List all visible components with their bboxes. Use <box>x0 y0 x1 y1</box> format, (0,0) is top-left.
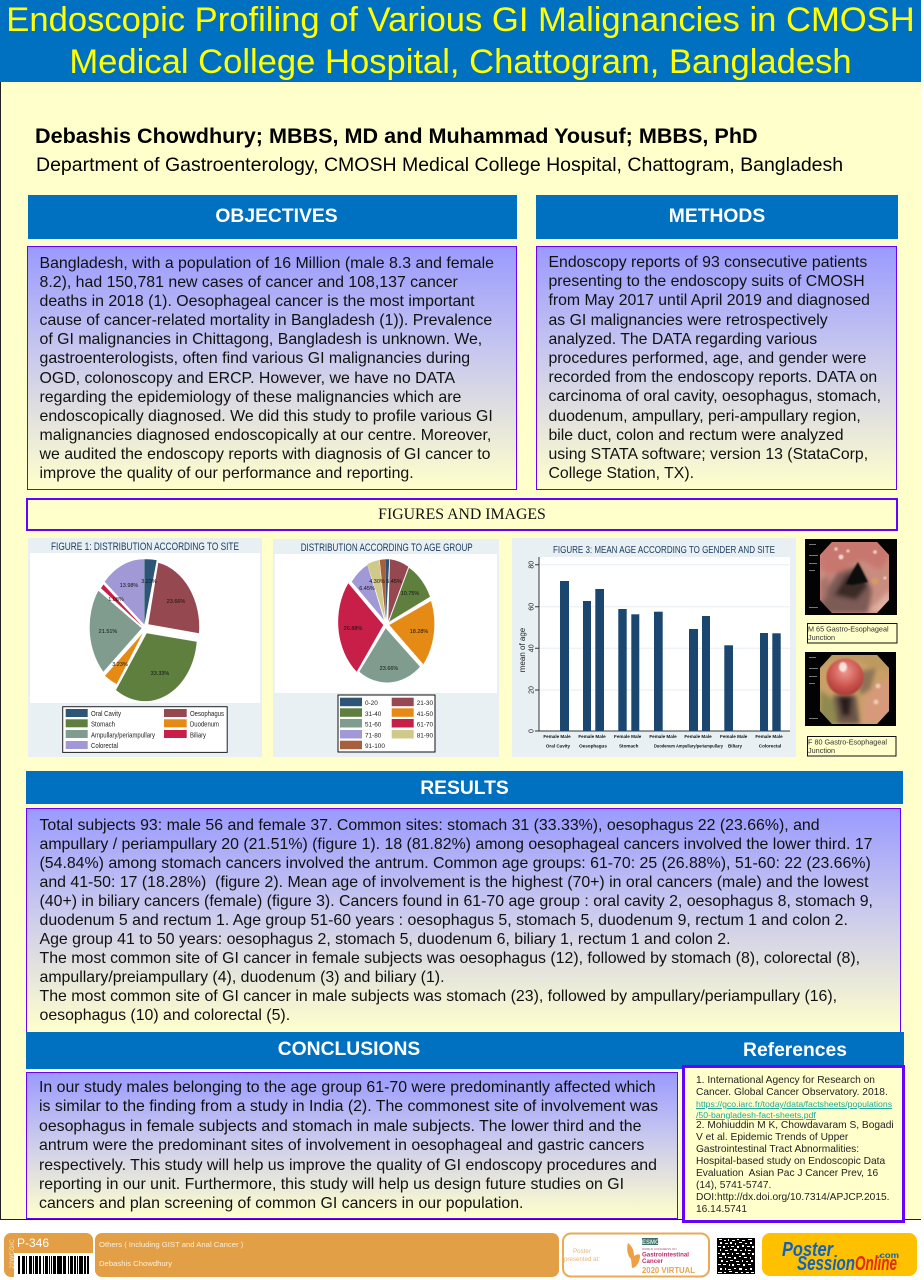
footer: PosterSessionOnline logo: Online <box>855 1253 897 1275</box>
chart: figure 1 pie by site: 21.51% <box>99 629 117 635</box>
panel: conclusions text: In our study males belonging to the age group 61-70 were predominantly affected which <box>39 1079 656 1096</box>
chart: figure 1 pie by site: Oesophagus <box>190 709 224 718</box>
panel: references list: DOI:http://dx.doi.org/10.7314/APJCP.2015. <box>696 1192 890 1203</box>
chart: figure 2 pie by age group: 6.45% <box>359 586 375 592</box>
chart: figure 2 pie by age group: 91-100 <box>365 743 385 750</box>
panel: references list: Cancer. Global Cancer Observatory. 2018. 2. Mohiuddin M K, Chowdavaram S, Bogadi <box>696 1087 894 1131</box>
panel: conclusions text: respectively. This study will help us improve the quality of GI endoscopy procedures and <box>39 1157 657 1174</box>
panel: conclusions text: antrum were the predominant sites of involvement in oesophageal and gastric cancers <box>39 1137 644 1154</box>
chart: figure 1 pie by site: Oral Cavity <box>91 709 121 718</box>
footer: topic and author bar <box>95 1233 559 1277</box>
chart: figure 2 pie by age group: 5.45% <box>386 579 402 585</box>
chart: figure 3 mean age bar chart: Oesophagus <box>579 744 607 748</box>
heading: results: RESULTS <box>420 778 509 799</box>
panel: methods text: Endoscopy reports of 93 consecutive patients <box>548 254 867 271</box>
chart: figure 2 pie by age group: 31-40 <box>365 711 382 718</box>
footer: conference badge <box>562 1232 710 1278</box>
panel: references list: Evaluation Asian Pac J Cancer Prev, 16 <box>696 1168 878 1179</box>
panel: results text: ampullary / periampullary 20 (21.51%) (figure 1). 18 (81.82%) among oesophageal cancers involved the lower third. 17 <box>40 836 873 853</box>
chart: figure 1 pie by site: Duodenum <box>190 720 219 728</box>
panel: results text: (40+) in biliary cancers (female) (figure 3). Cancers found in 61-70 age group : oral cavity 2, oesophagus 8, stomach 9, <box>40 893 873 910</box>
chart: figure 3 mean age bar chart <box>512 538 796 757</box>
chart: figure 2 pie by age group: 21-30 <box>417 700 433 707</box>
chart: figure 3 mean age bar chart: Female Male <box>543 734 571 739</box>
barcode <box>14 1253 93 1277</box>
panel: references list: 1. International Agency for Research on <box>696 1075 875 1086</box>
topic: Others ( Including GIST and Anal Cancer ) <box>99 1240 243 1249</box>
chart: figure 3 mean age bar chart: 80 <box>528 561 536 569</box>
panel: results text: ampullary/preiampullary (4), duodenum (3) and biliary (1). <box>40 969 444 986</box>
footer: poster number tab <box>4 1233 93 1277</box>
panel: results text: The most common site of GI cancer in male subjects was stomach (23), followed by ampullary/periampullary (16), <box>40 988 837 1005</box>
panel: results text: and 41-50: 17 (18.28%) (figure 2). Mean age of involvement is the highest (70+) in oral cancers (male) and the lowest <box>40 874 869 891</box>
chart: figure 3 mean age bar chart: 0 <box>528 729 536 733</box>
footer: conference badge: 2020 VIRTUAL <box>642 1266 695 1275</box>
chart: figure 1 pie by site: 33.33% <box>151 671 169 677</box>
heading: figures and images: FIGURES AND IMAGES <box>378 506 546 523</box>
footer: QR code <box>717 1238 755 1274</box>
chart: figure 2 pie by age group: 41-50 <box>417 711 433 718</box>
chart: figure 3 mean age bar chart: Female Male <box>578 734 606 739</box>
chart: figure 3 mean age bar chart: Oral Cavity <box>546 744 571 748</box>
image: endoscopy photo, female 80 <box>805 650 896 730</box>
chart: figure 3 mean age bar chart: 40 <box>528 644 536 652</box>
title banner: Endoscopic Profiling of Various GI Malignancies in CMOSH <box>6 1 915 39</box>
chart: figure 3 mean age bar chart: Ampullary/periampullary <box>676 744 723 748</box>
chart: figure 1 pie by site: 13.98% <box>120 583 138 589</box>
panel: references list: Hospital-based study on Endoscopic Data <box>696 1156 885 1167</box>
chart: figure 2 pie by age group: 0-20 <box>365 700 378 707</box>
heading: methods <box>536 195 898 239</box>
panel: references list: V et al. Epidemic Trends of Upper <box>696 1132 848 1143</box>
panel: conclusions text <box>26 1072 678 1219</box>
caption: female 80: F 80 Gastro-Esophageal <box>808 738 887 746</box>
footer: PosterSessionOnline logo: Poster <box>782 1239 834 1261</box>
panel: objectives text: improve the quality of our performance and reporting. <box>40 465 414 482</box>
panel: results text: oesophagus (10) and colorectal (5). <box>40 1007 290 1024</box>
panel: references list: /50-bangladesh-fact-sheets.pdf <box>696 1110 816 1120</box>
chart: figure 2 pie by age group: 23.66% <box>380 666 398 672</box>
authors: Debashis Chowdhury; MBBS, MD and Muhammad Yousuf; MBBS, PhD <box>35 123 758 148</box>
chart: figure 2 pie by age group: 26.88% <box>344 626 362 632</box>
chart: figure 3 mean age bar chart: Female Male <box>720 734 748 739</box>
panel: methods text: as GI malignancies were retrospectively <box>548 312 828 329</box>
panel: conclusions text: reporting in our unit. Furthermore, this study will help us design future studies on GI <box>39 1176 624 1193</box>
footer: conference badge: Gastrointestinal <box>642 1252 689 1258</box>
chart: figure 3 mean age bar chart: Female Male <box>649 734 677 739</box>
panel: references list: (14), 5741-5747. <box>696 1180 771 1191</box>
panel: methods text <box>536 246 897 490</box>
panel: results text: (54.84%) among stomach cancers involved the antrum. Common age groups: 61-70: 25 (26.88%), 51-60: 22 (23.66%) <box>40 855 871 872</box>
panel: objectives text: malignancies diagnosed endoscopically at our centre. Moreover, <box>40 427 491 444</box>
panel: methods text: College Station, TX). <box>548 465 694 482</box>
chart: figure 2 pie by age group: DISTRIBUTION ACCORDING TO AGE GROUP <box>301 542 473 554</box>
panel: conclusions text: is similar to the finding from a study in India (2). The commonest site of involvement was <box>39 1098 658 1115</box>
heading: figures and images <box>26 498 898 531</box>
panel: results text: duodenum 5 and rectum 1. Age group 51-60 years : oesophagus 5, stomach 5, duodenum 9, rectum 1 and colon 2. <box>40 912 848 929</box>
chart: figure 3 mean age bar chart: Stomach <box>619 744 639 748</box>
panel: conclusions text: cancers and plan screening of common GI cancers in our population. <box>39 1195 523 1212</box>
author: Debashis Chowdhury <box>99 1259 172 1268</box>
caption: female 80: Junction <box>808 746 835 755</box>
panel: conclusions text: oesophagus in female subjects and stomach in male subjects. The lower third and the <box>39 1118 641 1135</box>
caption: male 65: Junction <box>808 633 835 642</box>
panel: objectives text: Bangladesh, with a population of 16 Million (male 8.3 and female <box>40 255 494 272</box>
panel: references list <box>682 1065 905 1223</box>
affiliation: Department of Gastroenterology, CMOSH Medical College Hospital, Chattogram, Bangladesh <box>36 154 843 176</box>
footer: conference badge: Cancer <box>642 1258 664 1265</box>
panel: methods text: carcinoma of oral cavity, oesophagus, stomach, <box>548 388 881 405</box>
footer: conference badge: Poster <box>573 1248 591 1255</box>
chart: figure 3 mean age bar chart: mean of age <box>518 627 527 672</box>
chart: figure 1 pie by site: 23.66% <box>167 599 185 605</box>
chart: figure 2 pie by age group: 81-90 <box>417 732 433 740</box>
heading: objectives <box>28 195 517 239</box>
chart: figure 3 mean age bar chart: FIGURE 3: MEAN AGE ACCORDING TO GENDER AND SITE <box>553 545 775 556</box>
chart: figure 3 mean age bar chart: 20 <box>528 686 536 694</box>
title banner: Medical College Hospital, Chattogram, Bangladesh <box>69 43 852 81</box>
footer: conference badge: presented at: <box>564 1256 600 1263</box>
panel: methods text: bile duct, colon and rectum were analyzed <box>548 427 844 444</box>
footer: PosterSessionOnline logo: Session <box>797 1253 855 1275</box>
chart: figure 1 pie by site: Ampullary/periampullary <box>91 730 155 740</box>
panel: objectives text: cause of cancer-related mortality in Bangladesh (1)). Prevalence <box>40 312 492 329</box>
chart: figure 2 pie by age group: 10.75% <box>401 591 419 597</box>
panel: methods text: presenting to the endoscopy suits of CMOSH <box>548 273 865 290</box>
footer: PosterSessionOnline logo <box>762 1233 917 1276</box>
vertical code: 22WCGIC <box>9 1239 16 1269</box>
chart: figure 1 pie by site: 1.08% <box>108 597 124 603</box>
footer: PosterSessionOnline logo: .com <box>877 1251 899 1260</box>
figures area <box>28 538 898 757</box>
chart: figure 3 mean age bar chart: Duodenum <box>654 744 675 748</box>
panel: objectives text: OGD, colonoscopy and ERCP. However, we have no DATA <box>40 370 455 387</box>
chart: figure 1 pie by site: Colorectal <box>91 741 118 750</box>
chart: figure 2 pie by age group: 51-60 <box>365 722 382 728</box>
chart: figure 2 pie by age group <box>273 539 499 757</box>
footer: conference badge: ESMO <box>642 1240 660 1246</box>
title banner <box>0 0 921 82</box>
chart: figure 3 mean age bar chart: Biliary <box>728 744 742 748</box>
image: endoscopy photo, male 65 <box>805 538 897 618</box>
chart: figure 1 pie by site: FIGURE 1: DISTRIBUTION ACCORDING TO SITE <box>51 541 239 553</box>
chart: figure 2 pie by age group: 71-80 <box>365 732 382 740</box>
chart: figure 2 pie by age group: 4.30% <box>369 579 385 585</box>
caption: female 80 <box>808 736 896 756</box>
chart: figure 1 pie by site: Biliary <box>190 730 206 740</box>
footer: conference badge: WORLD CONGRESS ON <box>642 1247 677 1251</box>
chart: figure 1 pie by site <box>28 538 262 757</box>
chart: figure 3 mean age bar chart: 60 <box>528 603 536 611</box>
heading: objectives: OBJECTIVES <box>215 206 338 227</box>
chart: figure 1 pie by site: 3.23% <box>141 579 157 585</box>
chart: figure 3 mean age bar chart: Female Male <box>684 734 712 739</box>
heading: references: References <box>743 1040 847 1061</box>
panel: methods text: from May 2017 until April 2019 and diagnosed <box>548 292 870 309</box>
panel: methods text: analyzed. The DATA regarding various <box>548 331 817 348</box>
chart: figure 1 pie by site: 3.23% <box>112 662 128 668</box>
chart: figure 2 pie by age group: 18.28% <box>410 629 428 635</box>
panel: objectives text: endoscopically diagnosed. We did this study to profile various GI <box>40 408 493 425</box>
panel: results text <box>26 808 901 1034</box>
panel: references list: Gastrointestinal Tract Abnormalities: <box>696 1144 859 1155</box>
heading: references <box>682 1032 904 1065</box>
panel: methods text: procedures performed, age, and gender were <box>548 350 866 367</box>
panel: references list: 16.14.5741 <box>696 1204 747 1215</box>
panel: references list: https://gco.iarc.fr/today/data/factsheets/populations <box>696 1099 892 1109</box>
panel: objectives text: gastroenterologists, often find various GI malignancies during <box>40 350 470 367</box>
panel: objectives text: 8.2), had 150,781 new cases of cancer and 108,137 cancer <box>40 274 458 291</box>
caption: male 65 <box>808 624 897 643</box>
panel: objectives text: we audited the endoscopy reports with diagnosis of GI cancer to <box>40 446 490 463</box>
panel: results text: Total subjects 93: male 56 and female 37. Common sites: stomach 31 (33.33%), oesophagus 22 (23.66%), and <box>40 817 820 834</box>
panel: methods text: duodenum, ampullary, peri-ampullary region, <box>548 408 861 425</box>
panel: results text: The most common site of GI cancer in female subjects was oesophagus (12), followed by stomach (8), colorectal (8), <box>40 950 860 967</box>
heading: methods: METHODS <box>669 206 765 227</box>
heading: results <box>26 771 903 804</box>
panel: objectives text <box>27 246 517 490</box>
chart: figure 3 mean age bar chart: Colorectal <box>759 744 781 748</box>
panel: methods text: using STATA software; version 13 (StataCorp, <box>548 446 868 463</box>
panel: objectives text: deaths in 2018 (1). Oesophageal cancer is the most important <box>40 293 475 310</box>
heading: conclusions: CONCLUSIONS <box>278 1039 420 1060</box>
chart: figure 3 mean age bar chart: Female Male <box>755 734 783 739</box>
poster number: P-346 <box>17 1236 49 1250</box>
chart: figure 2 pie by age group: 61-70 <box>417 722 433 728</box>
caption: male 65: M 65 Gastro-Esophageal <box>808 624 889 634</box>
heading: conclusions <box>26 1032 682 1069</box>
panel: methods text: recorded from the endoscopy reports. DATA on <box>548 369 877 386</box>
panel: objectives text: regarding the epidemiology of these malignancies which are <box>40 389 461 406</box>
chart: figure 3 mean age bar chart: Female Male <box>614 734 642 739</box>
panel: results text: Age group 41 to 50 years: oesophagus 2, stomach 5, duodenum 6, biliary 1, rectum 1 and colon 2. <box>40 931 730 948</box>
chart: figure 1 pie by site: Stomach <box>91 720 115 728</box>
panel: objectives text: of GI malignancies in Chittagong, Bangladesh is unknown. We, <box>40 331 482 348</box>
